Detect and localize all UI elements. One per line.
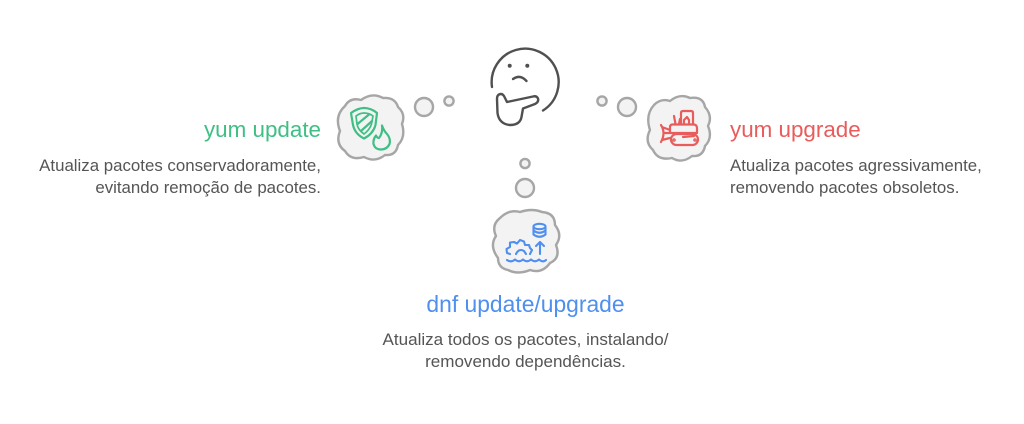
description: dnf update/upgrade: Atualiza todos os pacotes, instalando/ [383,330,668,349]
thought bubble: right large [618,98,636,116]
description: yum update: evitando remoção de pacotes. [95,178,321,197]
icon: thinking face [492,49,559,125]
heading: dnf update/upgrade: dnf update/upgrade [426,291,625,317]
description: yum upgrade: removendo pacotes obsoletos. [730,178,959,197]
heading: yum update: yum update [204,117,321,142]
cloud: left with shield icon [338,95,403,160]
description: yum update: Atualiza pacotes conservadoramente, [39,156,321,175]
thought bubble: bottom small [520,159,530,168]
description: dnf update/upgrade [382,330,668,371]
description: yum update [39,156,321,197]
description: dnf update/upgrade: removendo dependências. [425,352,626,371]
thought bubble: right small [597,96,607,106]
thought bubble: bottom large [516,179,534,197]
icon: bulldozer [661,111,698,145]
icon: shield and flame [351,108,390,150]
cloud: right with bulldozer icon [648,96,710,161]
heading: yum upgrade: yum upgrade [730,116,861,142]
icon: gear, waves and database [506,224,546,261]
cloud: bottom with gear and database icon [493,210,559,272]
thought bubble: left large [415,98,433,116]
description: yum upgrade [730,156,982,197]
description: yum upgrade: Atualiza pacotes agressivamente, [730,156,982,175]
thought bubble: left small [444,96,454,106]
